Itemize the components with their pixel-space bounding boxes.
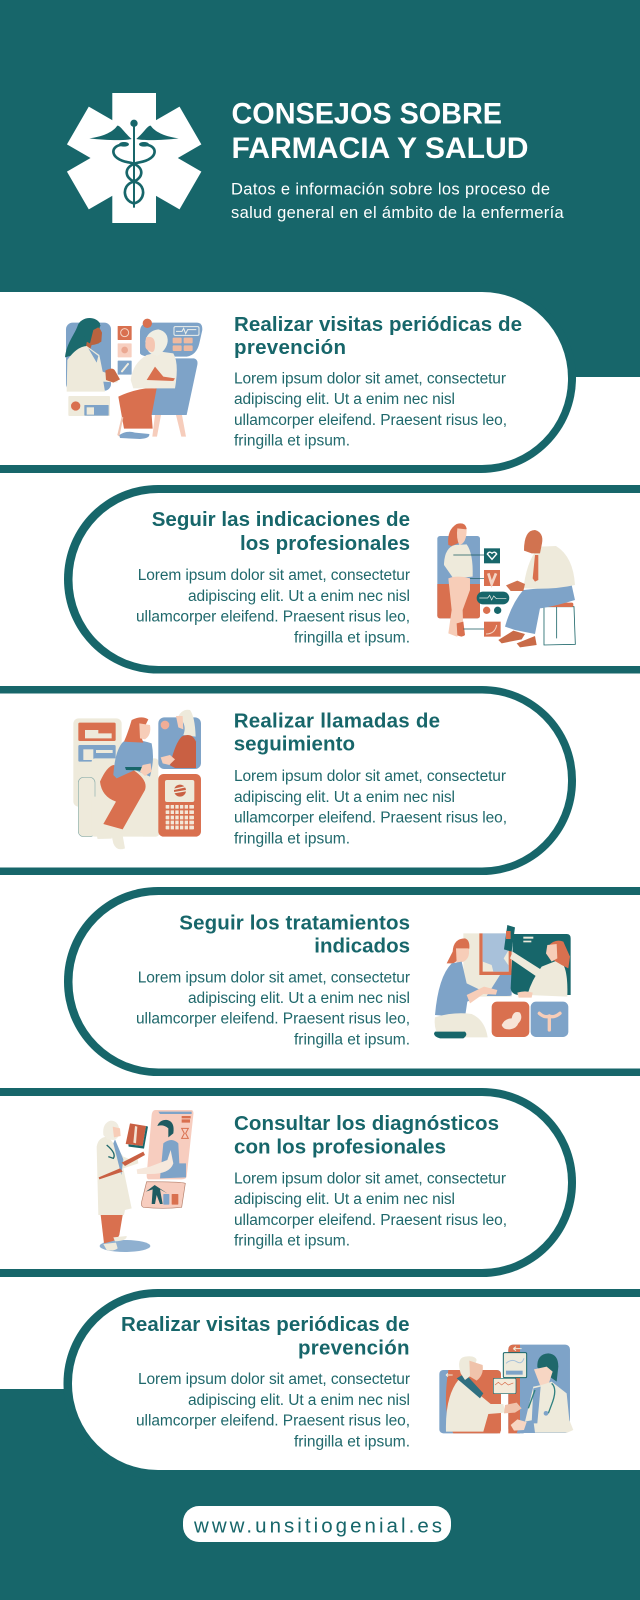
text block: visitas periódicas 2: adipiscing elit. Ut a enim nec nisl bbox=[188, 1392, 410, 1409]
heading: visitas periódicas: Realizar visitas periódicas de bbox=[234, 313, 522, 336]
header background bbox=[0, 0, 640, 377]
text block: visitas periódicas: adipiscing elit. Ut a enim nec nisl bbox=[234, 391, 455, 408]
text block: tratamientos: Lorem ipsum dolor sit amet, consectetur bbox=[138, 970, 410, 986]
heading: visitas periódicas: prevención bbox=[234, 336, 346, 359]
text block: tratamientos: adipiscing elit. Ut a enim nec nisl bbox=[188, 990, 410, 1007]
website pill bbox=[183, 1506, 451, 1542]
website pill: www.unsitiogenial.es bbox=[193, 1514, 442, 1538]
text block: indicaciones: adipiscing elit. Ut a enim nec nisl bbox=[188, 588, 410, 605]
heading: diagnósticos: con los profesionales bbox=[234, 1136, 446, 1158]
illustration: telemedicine consultation bbox=[434, 925, 571, 1038]
title: FARMACIA Y SALUD bbox=[232, 132, 528, 165]
text block: visitas periódicas 2: fringilla et ipsum. bbox=[294, 1434, 410, 1450]
text block: tratamientos: fringilla et ipsum. bbox=[294, 1032, 410, 1048]
panel: visitas periódicas 1 bbox=[0, 283, 576, 473]
text block: visitas periódicas bbox=[234, 370, 507, 450]
text block: visitas periódicas: Lorem ipsum dolor sit amet, consectetur bbox=[234, 370, 506, 388]
text block: indicaciones: fringilla et ipsum. bbox=[294, 630, 410, 646]
subtitle: Datos e información sobre los proceso de bbox=[231, 180, 550, 198]
heading: diagnósticos: Consultar los diagnósticos bbox=[234, 1112, 499, 1135]
panel: tratamientos bbox=[64, 887, 640, 1076]
heading: indicaciones bbox=[152, 508, 410, 555]
illustration: doctor and elderly patient bbox=[65, 318, 202, 439]
subtitle bbox=[231, 180, 565, 222]
heading: llamadas: Realizar llamadas de bbox=[234, 710, 440, 732]
title bbox=[232, 98, 528, 165]
panel: llamadas bbox=[0, 686, 576, 875]
icon: star of life with caduceus bbox=[67, 93, 201, 223]
text block: visitas periódicas: fringilla et ipsum. bbox=[234, 432, 350, 450]
heading: visitas periódicas 2: Realizar visitas periódicas de bbox=[121, 1313, 410, 1336]
heading: visitas periódicas 2 bbox=[121, 1313, 410, 1360]
text block: visitas periódicas 2 bbox=[136, 1371, 410, 1450]
heading: indicaciones: los profesionales bbox=[240, 532, 410, 555]
text block: diagnósticos: ullamcorper eleifend. Praesent risus leo, bbox=[234, 1212, 507, 1229]
text block: tratamientos bbox=[136, 970, 410, 1048]
text block: visitas periódicas 2: ullamcorper eleifend. Praesent risus leo, bbox=[136, 1412, 410, 1430]
text block: llamadas: fringilla et ipsum. bbox=[234, 830, 350, 848]
panel: indicaciones bbox=[64, 485, 640, 674]
heading: llamadas: seguimiento bbox=[234, 732, 355, 756]
text block: llamadas: Lorem ipsum dolor sit amet, consectetur bbox=[234, 768, 506, 785]
text block: indicaciones bbox=[136, 567, 410, 646]
text block: indicaciones: Lorem ipsum dolor sit amet, consectetur bbox=[138, 567, 410, 584]
heading: visitas periódicas 2: prevención bbox=[298, 1336, 410, 1360]
heading: llamadas bbox=[234, 710, 440, 756]
text block: diagnósticos: fringilla et ipsum. bbox=[234, 1232, 350, 1250]
heading: indicaciones: Seguir las indicaciones de bbox=[152, 508, 410, 531]
text block: llamadas: ullamcorper eleifend. Praesent risus leo, bbox=[234, 810, 507, 826]
illustration: patient and seated doctor bbox=[437, 523, 575, 647]
text block: diagnósticos bbox=[234, 1170, 507, 1250]
subtitle: salud general en el ámbito de la enfermería bbox=[231, 204, 565, 222]
heading: diagnósticos bbox=[234, 1112, 499, 1158]
text block: tratamientos: ullamcorper eleifend. Praesent risus leo, bbox=[136, 1010, 410, 1028]
text block: llamadas: adipiscing elit. Ut a enim nec nisl bbox=[234, 789, 455, 806]
illustration: elderly patient and doctor bbox=[439, 1345, 573, 1433]
illustration: doctor with patient on screen bbox=[97, 1110, 193, 1252]
panel: visitas periódicas 2 bbox=[64, 1289, 640, 1479]
text block: diagnósticos: adipiscing elit. Ut a enim nec nisl bbox=[234, 1191, 455, 1208]
heading: tratamientos bbox=[179, 912, 410, 958]
heading: visitas periódicas bbox=[234, 313, 522, 359]
text block: visitas periódicas: ullamcorper eleifend. Praesent risus leo, bbox=[234, 412, 507, 429]
heading: tratamientos: Seguir los tratamientos bbox=[179, 912, 410, 934]
illustration: two women talking bbox=[73, 710, 201, 849]
panel: diagnósticos bbox=[0, 1088, 576, 1277]
text block: diagnósticos: Lorem ipsum dolor sit amet, consectetur bbox=[234, 1170, 506, 1188]
text block: llamadas bbox=[234, 768, 507, 848]
footer background bbox=[0, 1389, 640, 1600]
title: CONSEJOS SOBRE bbox=[232, 98, 502, 130]
text block: indicaciones: ullamcorper eleifend. Praesent risus leo, bbox=[136, 608, 410, 626]
text block: visitas periódicas 2: Lorem ipsum dolor sit amet, consectetur bbox=[138, 1371, 410, 1388]
heading: tratamientos: indicados bbox=[314, 934, 410, 958]
